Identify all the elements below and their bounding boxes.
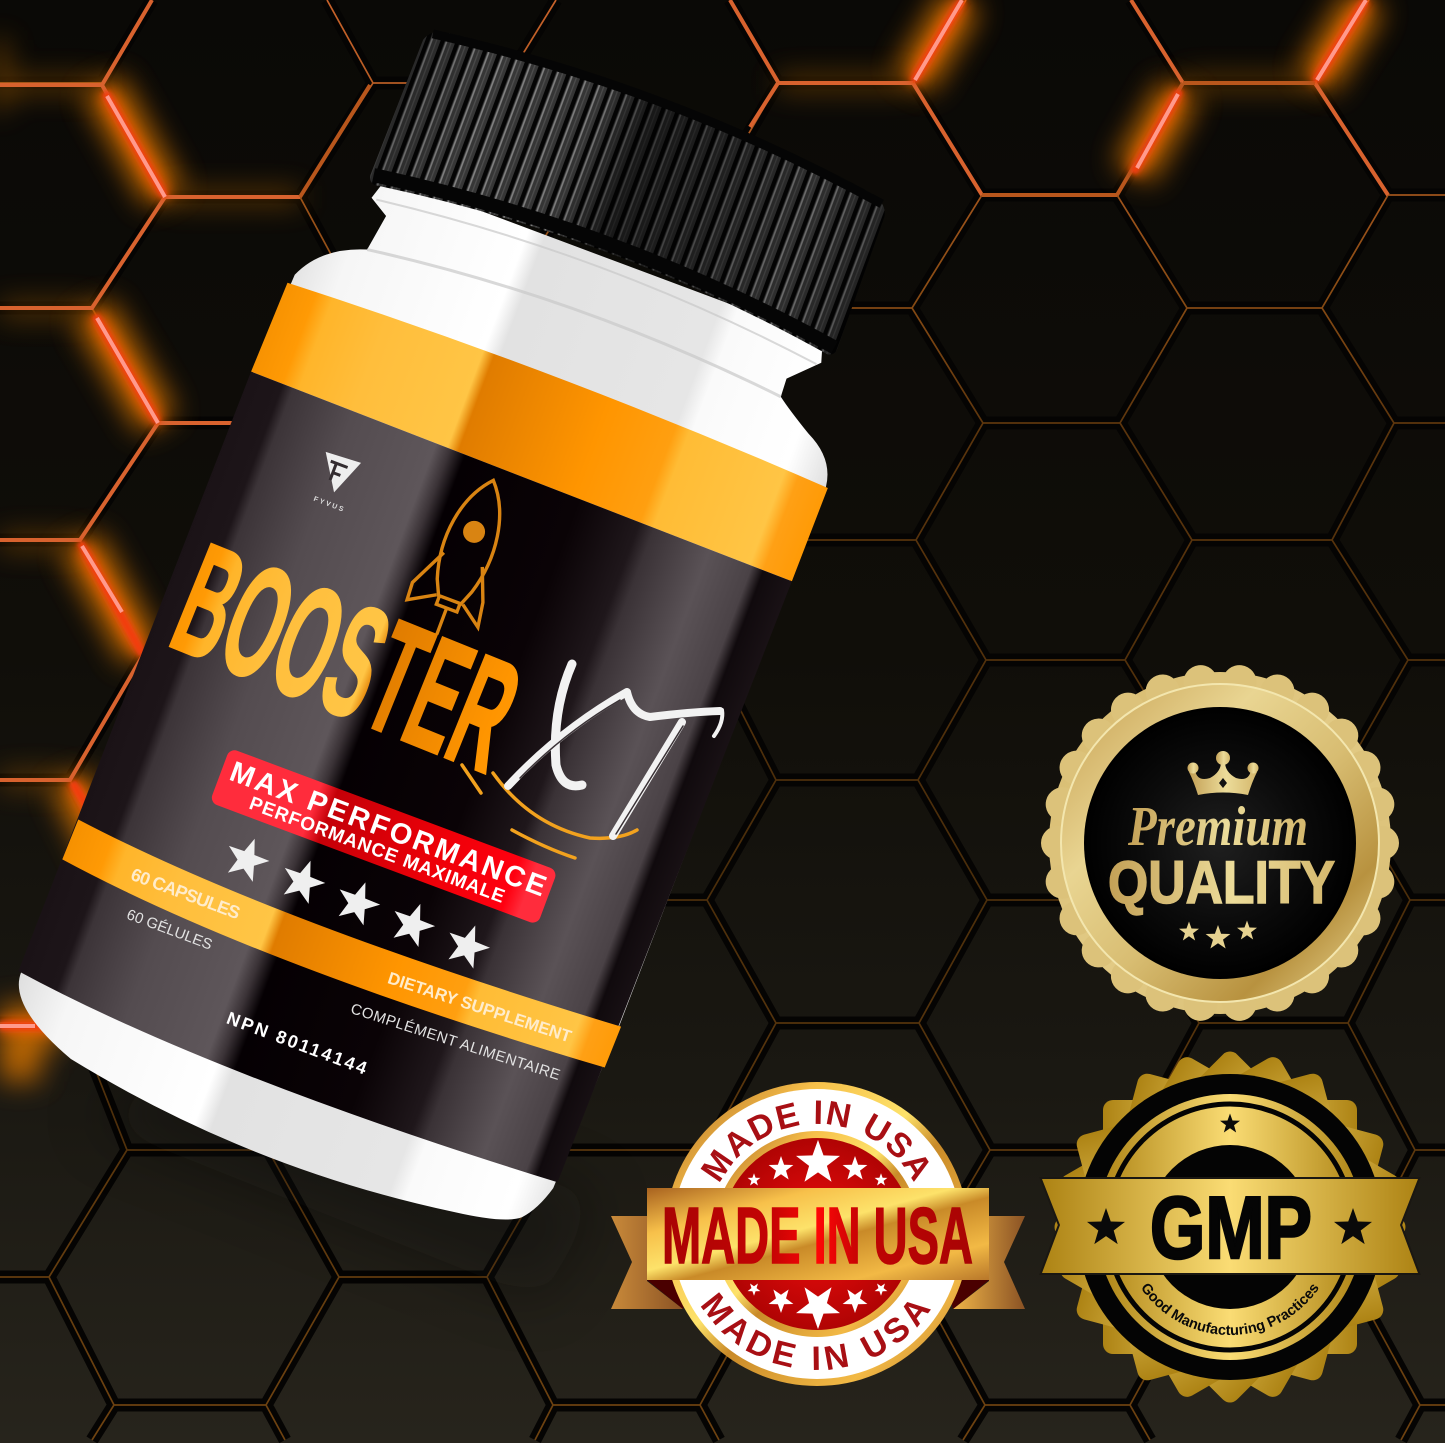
text: NPN number: NPN 80114144 [224, 1008, 370, 1078]
five stars [219, 831, 497, 972]
ribbon text: GMP: GMP [1150, 1178, 1312, 1277]
three stars [1179, 920, 1257, 949]
product bottle [0, 0, 935, 1258]
badge: GMP [1042, 1052, 1418, 1402]
product bottle: BOOSTER [152, 510, 541, 806]
brand logo: FYVUS [307, 450, 363, 514]
black centre [1084, 707, 1356, 979]
text: QUALITY: QUALITY [1108, 849, 1335, 916]
bottle body [0, 153, 874, 1258]
scalloped gold edge [1049, 672, 1391, 1014]
gold ring [1073, 696, 1367, 990]
curved text bottom: MADE IN USA [700, 1292, 931, 1370]
ribbon tails [611, 1216, 1025, 1309]
banner text: MADE IN USA [662, 1191, 973, 1280]
circular seal [665, 1082, 969, 1386]
dark label panel [12, 369, 794, 1194]
brand logo: FYVUS: FYVUS [312, 496, 346, 514]
upper orange band [249, 276, 831, 582]
text: Premium: Premium [1127, 796, 1308, 858]
gold banner [647, 1188, 989, 1280]
icon: crown [1188, 751, 1258, 795]
badge: made in USA [611, 1082, 1025, 1386]
badge: premium quality [1049, 672, 1391, 1014]
text: 60 gelules: 60 GÉLULES [124, 906, 215, 954]
gold burst [1050, 1047, 1410, 1407]
text: 60 capsules: 60 CAPSULES [128, 864, 243, 923]
bottle shadow [90, 1050, 600, 1300]
white stars [748, 1140, 887, 1329]
neck and shoulder shading [359, 186, 822, 411]
concentric rings [1077, 1074, 1383, 1380]
gold ribbon [1042, 1179, 1418, 1273]
orange swoosh under XT [462, 765, 637, 858]
red banner [210, 748, 558, 925]
lower orange band [57, 819, 622, 1079]
curved text top: MADE IN USA [700, 1100, 929, 1182]
ribbon stars [1087, 1208, 1372, 1244]
bottle cap [368, 12, 898, 357]
icon: rocket [398, 466, 528, 647]
glowing hexagon edges [0, 0, 1388, 1060]
text: dietary supplement: DIETARY SUPPLEMENT [385, 969, 574, 1046]
handwritten XT mark [508, 664, 722, 836]
text: complement alimentaire: COMPLÉMENT ALIMENTAIRE [349, 1000, 562, 1084]
small star [1220, 1114, 1240, 1132]
curved text: Good Manufacturing Practices [1142, 1284, 1318, 1336]
banner heading: MAX PERFORMANCE [225, 756, 550, 903]
banner subheading: PERFORMANCE MAXIMALE [246, 793, 507, 908]
